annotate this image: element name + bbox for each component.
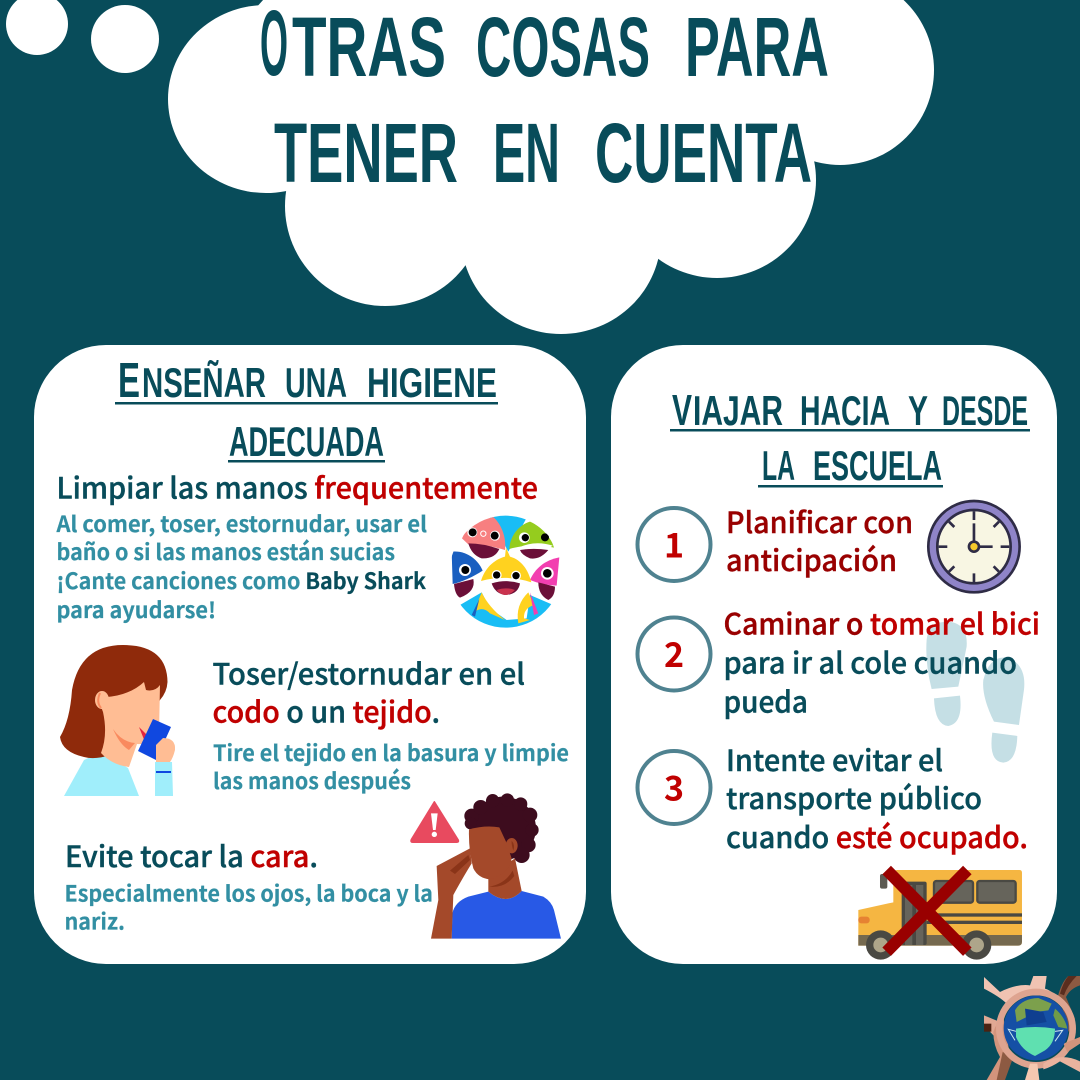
step 2 text: pueda: [724, 680, 808, 722]
text block: clean hands: Limpiar las manos frequentemente: [56, 466, 538, 508]
text block: avoid touching face: nariz.: [64, 904, 125, 936]
icon: baby shark family: [452, 516, 560, 628]
step 2 badge: [638, 618, 710, 690]
heading: hygiene: [115, 354, 498, 465]
heading: hygiene: NSEÑAR: [142, 359, 266, 406]
step 2 text: Caminar o tomar el bici: [724, 602, 1040, 644]
title: PARA: [685, 0, 829, 94]
text block: clean hands: ¡Cante canciones como Baby Shark: [56, 564, 427, 596]
title: [260, 0, 829, 200]
text block: cough or sneeze: [212, 652, 569, 796]
icon: clock: [928, 501, 1020, 592]
thought cloud behind title: [168, 0, 934, 334]
step 1 badge: [638, 508, 710, 581]
title: TRAS: [292, 0, 446, 94]
icon: warning triangle: [411, 802, 459, 842]
step 2 badge: 2: [664, 628, 684, 677]
step 3 badge: 3: [664, 762, 684, 810]
panel: hygiene: [34, 345, 586, 964]
text block: clean hands: baño o si las manos están sucias: [56, 535, 395, 567]
step 1 badge: 1: [664, 518, 684, 568]
heading: travel: V: [672, 386, 692, 435]
heading: hygiene: ADECUADA: [229, 418, 384, 465]
heading: travel: LA: [762, 442, 795, 489]
text block: avoid touching face: Evite tocar la cara.: [65, 834, 318, 876]
text block: clean hands: para ayudarse!: [56, 593, 216, 625]
heading: travel: Y: [908, 387, 928, 434]
title: COSAS: [476, 0, 650, 94]
decorative thought bubbles: [6, 0, 159, 73]
icon: crossed-out school bus: [858, 870, 1022, 960]
text block: avoid touching face: [64, 834, 433, 936]
heading: travel: [670, 386, 1030, 489]
heading: hygiene: UNA: [285, 359, 347, 406]
heading: travel: IAJAR: [693, 387, 783, 434]
heading: hygiene: E: [118, 354, 140, 408]
icon: footprints: [926, 622, 1024, 763]
title: EN: [493, 106, 560, 200]
panel: travel to school: [611, 345, 1057, 964]
step 1 text: Planificar con: [726, 500, 913, 542]
logo: earth with mask held by hands: [984, 976, 1080, 1080]
title: CUENTA: [595, 106, 812, 200]
heading: hygiene: HIGIENE: [367, 359, 497, 406]
step 3 badge: [638, 751, 710, 824]
text block: cough or sneeze: codo o un tejido.: [212, 690, 440, 732]
text block: clean hands: [56, 466, 538, 625]
text block: cough or sneeze: Tire el tejido en la basura y limpie: [213, 736, 569, 768]
heading: travel: ESCUELA: [813, 442, 942, 489]
text block: cough or sneeze: las manos después: [213, 764, 411, 796]
text block: avoid touching face: Especialmente los ojos, la boca y la: [64, 876, 433, 908]
step 3 text: [726, 738, 1028, 857]
illustration: woman coughing into tissue: [60, 645, 175, 796]
step 2 text: para ir al cole cuando: [724, 640, 1017, 682]
step 1 text: [726, 500, 913, 580]
illustration: man touching face with warning sign: [411, 793, 561, 939]
title: TENER: [274, 106, 458, 200]
step 1 text: anticipación: [726, 538, 897, 580]
text block: clean hands: Al comer, toser, estornudar, usar el: [56, 507, 427, 539]
step 3 text: cuando esté ocupado.: [726, 815, 1028, 857]
step 2 text: [724, 602, 1040, 722]
step 3 text: transporte público: [726, 776, 982, 818]
step 3 text: Intente evitar el: [726, 738, 943, 780]
heading: travel: HACIA: [800, 387, 890, 434]
text block: cough or sneeze: Toser/estornudar en el: [212, 652, 525, 694]
